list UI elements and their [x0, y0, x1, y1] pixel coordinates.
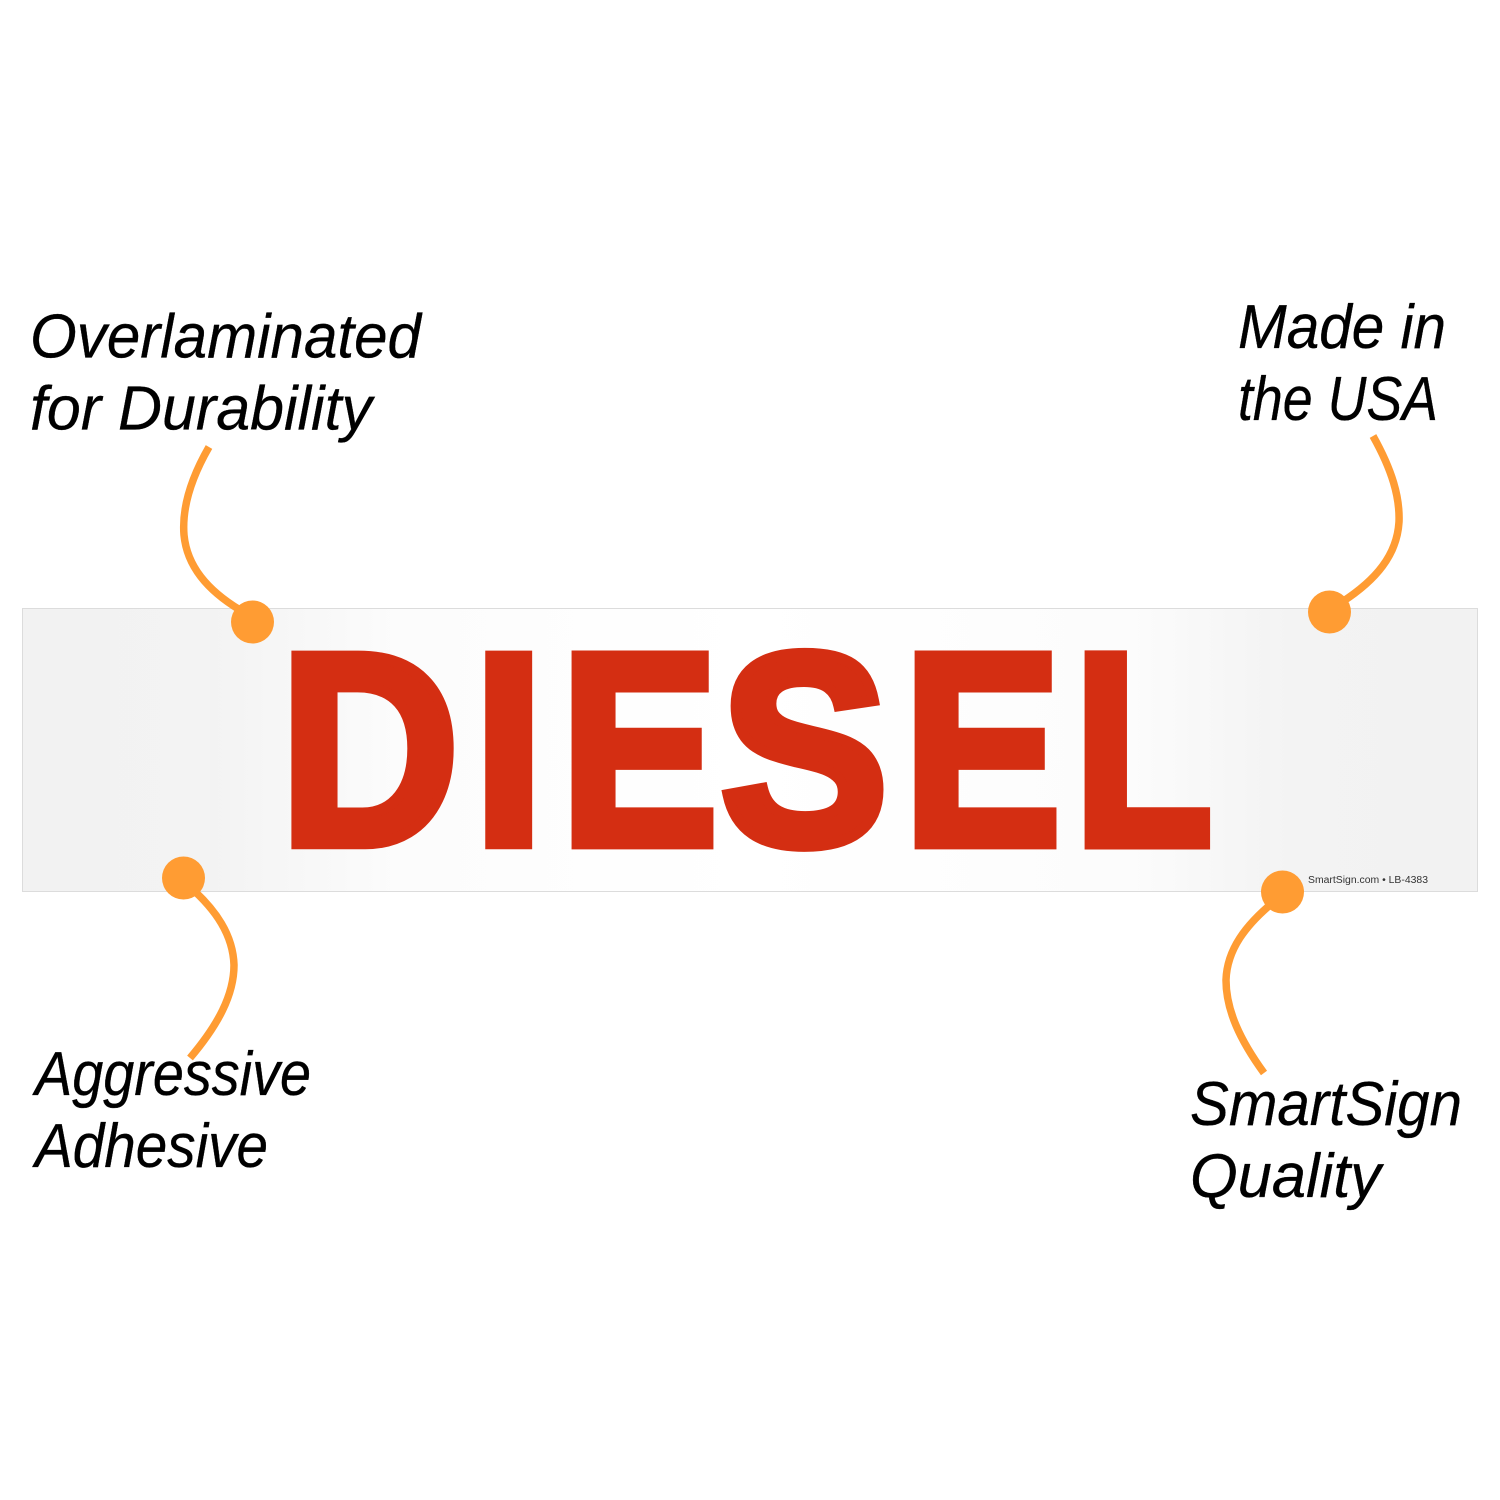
callout text: Made in the USA: the USA — [1238, 365, 1438, 434]
sign heading: DIESEL — [280, 597, 1212, 902]
callout text: SmartSign Quality: Quality — [1190, 1142, 1385, 1211]
callout connector: bottom left — [162, 856, 234, 1058]
callout connector: bottom right — [1226, 870, 1304, 1073]
callout text: Overlaminated for Durability — [30, 302, 423, 444]
callout text: Overlaminated for Durability: Overlaminated — [30, 302, 423, 372]
callout text: Aggressive Adhesive: Aggressive — [31, 1040, 311, 1109]
callout connector: top right — [1308, 436, 1399, 634]
callout connector: top left — [184, 447, 274, 644]
callout text: Overlaminated for Durability: for Durability — [30, 374, 376, 444]
sign panel — [22, 597, 1478, 902]
callout text: Made in the USA — [1238, 293, 1446, 434]
sign heading: DIESEL: E — [904, 597, 1061, 901]
callout text: SmartSign Quality — [1190, 1070, 1462, 1211]
sign heading: DIESEL: S — [721, 598, 888, 902]
sign heading: DIESEL: D — [280, 599, 459, 902]
sign heading: DIESEL: L — [1074, 597, 1212, 901]
callout text: SmartSign Quality: SmartSign — [1190, 1070, 1462, 1139]
sign heading: DIESEL: I — [474, 598, 544, 902]
sign heading: DIESEL: E — [561, 597, 718, 901]
sign small print: SmartSign.com • LB-4383 — [1308, 875, 1428, 886]
callout text: Made in the USA: Made in — [1238, 293, 1446, 362]
callout text: Aggressive Adhesive — [31, 1040, 311, 1181]
callout text: Aggressive Adhesive: Adhesive — [31, 1112, 268, 1181]
